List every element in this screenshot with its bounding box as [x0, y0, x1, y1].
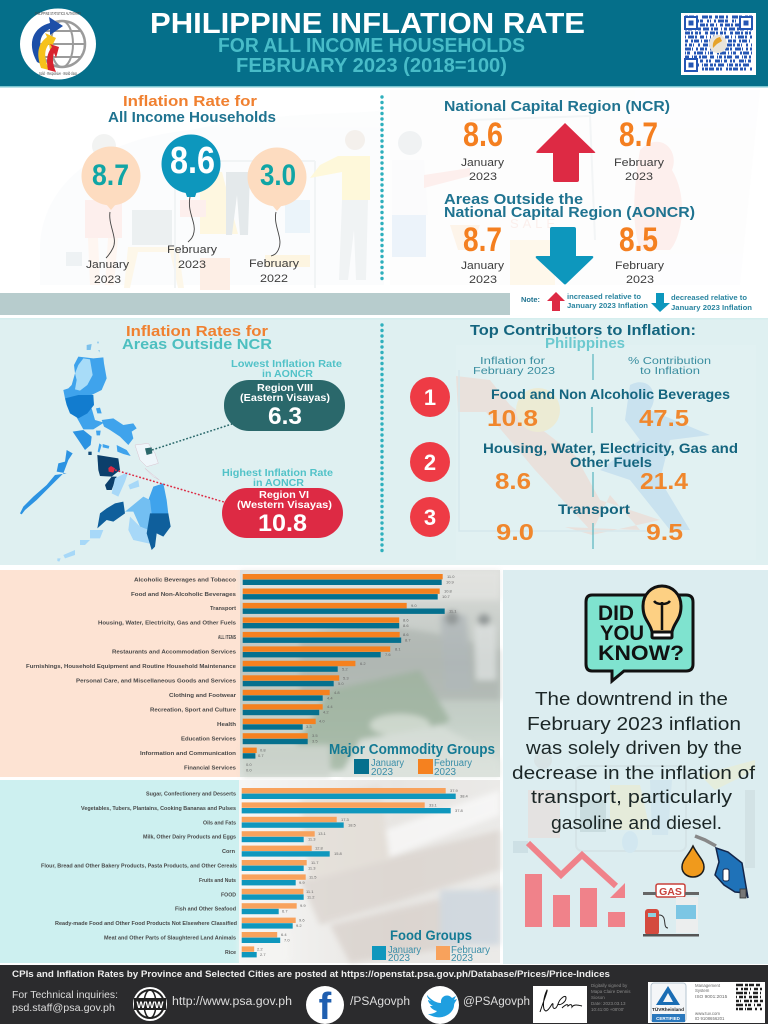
row: transport: 9.0	[411, 603, 417, 608]
row: furnishings: Furnishings, Household Equipment and Routine Household Maintenance	[26, 664, 236, 670]
row: food	[221, 889, 315, 900]
row: information: 0.7	[258, 753, 264, 758]
title: PHILIPPINE INFLATION RATE	[150, 8, 585, 40]
row: clothing: Clothing and Footwear	[169, 693, 237, 699]
faint shopping illustration	[40, 90, 760, 290]
Philippine map	[20, 342, 171, 562]
note legend: January 2023 Inflation	[671, 305, 752, 312]
row: education: 3.5	[312, 733, 318, 738]
NCR January value	[461, 116, 505, 183]
certification badge: System	[695, 988, 710, 993]
arrow: NCR up	[536, 123, 595, 182]
row: all items: 8.6	[403, 632, 409, 637]
digital signature: 10:41:00 +08'00'	[591, 1007, 624, 1012]
row: flour: 11.7	[311, 860, 319, 865]
icon: did you know speech bubble	[586, 586, 693, 681]
icon: falling bar chart	[525, 843, 625, 927]
AONCR January value: January	[461, 260, 505, 272]
digital signature: Mapa Claire Dennis	[591, 989, 631, 994]
note legend: increased relative to	[567, 294, 641, 301]
footer	[0, 965, 768, 1024]
row: vegetables: 33.1	[429, 802, 438, 807]
row: sugar: 37.9	[450, 788, 459, 793]
certification badge: www.tuv.com	[695, 1011, 720, 1016]
row: milk: 11.3	[308, 837, 316, 842]
header banner	[0, 0, 768, 88]
column header: contribution: % Contribution	[628, 355, 711, 367]
row: vegetables	[81, 802, 464, 813]
heading: inflation rate for all income households	[108, 93, 276, 126]
chart heading and legend: February	[451, 945, 490, 956]
icon: website: WWW	[136, 1000, 164, 1011]
chart heading and legend: Major Commodity Groups	[329, 742, 495, 758]
balloon: February 2023: February	[167, 244, 218, 256]
panel: top contributors	[410, 322, 756, 560]
heading: NCR: National Capital Region (NCR)	[444, 98, 670, 115]
callout: region VI pill	[222, 488, 343, 538]
row: rice: 2.7	[260, 952, 266, 957]
callout: lowest inflation rate label: in AONCR	[262, 369, 314, 380]
row: financial: 0.0	[246, 768, 252, 773]
footer notice: CPIs and Inflation Rates by Province and Selected Cities are posted at https://openstat.psa.gov.ph/Database/Prices/Price-Indices	[12, 969, 610, 979]
row: fish	[175, 903, 306, 914]
row: food: 11.1	[306, 889, 314, 894]
column header: inflation	[473, 355, 555, 377]
technical inquiries	[12, 989, 118, 1014]
contributor 2: 2	[424, 450, 436, 475]
row: rice: Rice	[225, 950, 236, 956]
chart heading and legend: February	[434, 758, 472, 769]
row: sugar	[146, 788, 469, 799]
row: fish: Fish and Other Seafood	[175, 907, 237, 913]
icon: light bulb	[643, 586, 681, 638]
column header: contribution	[628, 355, 711, 377]
row: fish: 9.9	[300, 903, 306, 908]
icon: did you know speech bubble: DID	[598, 602, 634, 625]
AONCR January value: 8.7	[463, 221, 502, 259]
subtitle	[218, 35, 525, 77]
balloon: January 2023: January	[86, 259, 130, 271]
row: financial: Financial Services	[184, 765, 236, 771]
row: all items: 8.7	[405, 637, 411, 642]
faint shopping illustration: SALE	[510, 216, 555, 231]
NCR February value: 2023	[625, 171, 653, 183]
heading: AONCR: Areas Outside the	[444, 191, 583, 208]
explanatory text: decrease in the inflation of	[512, 763, 756, 783]
note legend: January 2023 Inflation	[567, 303, 648, 310]
chart heading and legend: 2023	[451, 953, 473, 964]
balloon: February 2022: 3.0	[260, 159, 296, 192]
row: corn: 15.8	[334, 851, 343, 856]
note legend: Note:	[521, 297, 540, 304]
row: flour: 11.3	[308, 866, 316, 870]
row: housing: 8.6	[403, 623, 409, 628]
digital signature: Digitally signed by	[591, 983, 628, 988]
row: all items	[218, 632, 411, 643]
row: information: 0.8	[260, 748, 266, 753]
NCR January value: 2023	[469, 171, 497, 183]
row: ready-made: 9.6	[299, 918, 305, 923]
row: restaurants: Restaurants and Accommodation Services	[112, 650, 236, 656]
contributor 2: Other Fuels	[570, 454, 652, 470]
panel: all income households and regional rates	[0, 90, 760, 315]
callout: region VIII pill: 6.3	[268, 403, 302, 430]
callout: region VIII pill: (Eastern Visayas)	[240, 393, 330, 404]
chart heading and legend: 2023	[371, 767, 393, 778]
row: financial	[184, 762, 252, 773]
row: fruits	[199, 874, 317, 885]
row: health: 4.0	[319, 719, 325, 724]
callout: region VIII pill	[224, 380, 345, 431]
AONCR February value	[615, 221, 665, 286]
row: food and non-alcoholic: 10.7	[442, 594, 451, 599]
callout: region VI pill: Region VI	[259, 490, 309, 501]
row: personal care: Personal Care, and Miscellaneous Goods and Services	[76, 679, 236, 685]
NCR January value: January	[461, 157, 505, 169]
contributor 3: 9.5	[646, 519, 683, 545]
row: corn: 12.8	[315, 846, 324, 851]
QR code	[681, 13, 756, 75]
row: fish: 6.7	[282, 909, 288, 914]
certification badge: Management	[695, 983, 721, 988]
contributor 3	[410, 497, 683, 545]
chart heading and legend	[372, 928, 490, 964]
row: transport: Transport	[210, 606, 236, 612]
row: oils: 18.5	[348, 822, 357, 827]
contributor 2: 21.4	[640, 468, 688, 494]
balloon: January 2023: 2023	[94, 274, 121, 286]
contributor 2	[410, 440, 738, 494]
heading: inflation rate for all income households: All Income Households	[108, 109, 276, 126]
panel: major commodity groups chart	[0, 570, 500, 778]
row: meat: 6.4	[281, 932, 287, 937]
certification badge: CERTIFIED	[656, 1016, 681, 1021]
row: flour: Flour, Bread and Other Bakery Products, Pasta Products, and Other Cereals	[41, 864, 237, 870]
explanatory text: was solely driven by the	[525, 738, 742, 758]
balloon: February 2022	[248, 148, 306, 285]
explanatory text: The downtrend in the	[535, 689, 728, 709]
heading: AONCR	[444, 191, 695, 221]
column header: inflation: February 2023	[473, 365, 555, 377]
row: financial: 0.0	[246, 762, 252, 767]
subtitle: FEBRUARY 2023 (2018=100)	[236, 55, 507, 77]
icon: did you know speech bubble: KNOW?	[598, 642, 684, 665]
panel: did you know	[503, 570, 768, 964]
certification badge	[648, 982, 765, 1023]
row: food: FOOD	[221, 892, 236, 898]
icon: fuel nozzle	[695, 836, 748, 898]
icon: gas station: GAS	[659, 886, 682, 898]
chart heading and legend: 2023	[434, 767, 456, 778]
row: food and non-alcoholic: Food and Non-Alcoholic Beverages	[131, 592, 236, 598]
row: personal care: 5.3	[343, 675, 349, 680]
row: information: Information and Communication	[140, 751, 237, 757]
row: alcoholic beverages: 10.9	[446, 580, 455, 584]
faint shoppers illustration	[513, 751, 755, 868]
callout: lowest inflation rate label: Lowest Inflation Rate	[231, 359, 342, 370]
icon: fuel drop	[682, 846, 704, 877]
row: education: 3.5	[312, 739, 318, 744]
technical inquiries: For Technical inquiries:	[12, 989, 118, 1001]
dotted leader: highest	[115, 470, 224, 502]
callout: region VI pill: 10.8	[258, 510, 307, 537]
panel: food groups chart	[0, 780, 500, 964]
technical inquiries: psd.staff@psa.gov.ph	[12, 1002, 115, 1014]
contributor 1	[410, 377, 730, 431]
NCR February value: February	[614, 157, 665, 169]
column header: contribution: to Inflation	[640, 365, 700, 377]
explanatory text: gasoline and diesel.	[551, 813, 722, 833]
faint falling arrow and runner	[456, 345, 756, 560]
explanatory text: transport, particularly	[531, 787, 732, 807]
AONCR February value: 8.5	[619, 221, 658, 259]
AONCR January value: 2023	[469, 274, 497, 286]
digital signature: Date: 2023.03.13	[591, 1001, 626, 1006]
heading: inflation rates for areas outside NCR: Inflation Rates for	[126, 323, 268, 340]
row: housing: Housing, Water, Electricity, Gas and Other Fuels	[98, 621, 236, 627]
heading: top contributors: Philippines	[545, 335, 625, 352]
row: vegetables: Vegetables, Tubers, Plantains, Cooking Bananas and Pulses	[81, 806, 236, 812]
row: all items: ALL ITEMS	[218, 635, 236, 641]
contributor 1: 47.5	[639, 405, 689, 431]
row: furnishings	[26, 661, 366, 672]
icon: did you know speech bubble: YOU	[600, 622, 644, 645]
row: food and non-alcoholic	[131, 588, 453, 600]
heading: inflation rates for areas outside NCR: Areas Outside NCR	[122, 336, 272, 353]
row: ready-made	[55, 918, 305, 929]
chart heading and legend: Food Groups	[390, 928, 472, 943]
website url: http://www.psa.gov.ph	[172, 996, 292, 1008]
row: furnishings: 6.2	[360, 661, 366, 666]
contributor 2: Housing, Water, Electricity, Gas and	[483, 440, 738, 456]
callout: highest inflation rate label: in AONCR	[253, 478, 305, 489]
chart heading and legend	[329, 742, 495, 778]
row: recreation: 4.2	[323, 710, 329, 715]
icon: twitter	[421, 986, 459, 1024]
row: ready-made: 9.2	[296, 923, 302, 928]
balloon: January 2023	[82, 146, 140, 286]
row: restaurants: 8.1	[395, 646, 401, 651]
AONCR February value: 2023	[626, 274, 654, 286]
row: transport: 11.1	[449, 608, 457, 613]
row: sugar: 38.4	[460, 794, 469, 798]
PSA logo: Solid · Responsive · World-class	[39, 71, 77, 76]
row: meat: 7.0	[284, 938, 290, 942]
row: alcoholic beverages	[134, 574, 455, 585]
row: personal care	[76, 675, 349, 686]
chart heading and legend: January	[388, 945, 421, 956]
heading: top contributors	[470, 322, 696, 352]
callout: highest inflation rate label: Highest Inflation Rate	[222, 468, 333, 479]
row: recreation	[150, 704, 333, 715]
AONCR February value: February	[615, 260, 665, 272]
certification badge: ISO 9001:2015	[695, 994, 728, 1000]
row: restaurants	[112, 646, 401, 657]
facebook handle: /PSAgovph	[350, 996, 410, 1008]
row: milk: 13.1	[318, 831, 327, 836]
row: recreation: Recreation, Sport and Culture	[150, 707, 236, 713]
row: education: Education Services	[181, 736, 236, 742]
heading: AONCR: National Capital Region (AONCR)	[444, 204, 695, 221]
commodity bars	[26, 574, 457, 773]
certification badge: ID 9108656201	[695, 1016, 725, 1021]
row: sugar: Sugar, Confectionery and Desserts	[146, 792, 236, 798]
row: education	[181, 733, 318, 744]
row: corn: Corn	[222, 849, 236, 855]
row: alcoholic beverages: 11.0	[447, 574, 455, 579]
subtitle: FOR ALL INCOME HOUSEHOLDS	[218, 35, 525, 57]
dotted leader: lowest	[152, 424, 232, 450]
callout: region VIII pill: Region VIII	[257, 383, 313, 394]
balloon: February 2023: 2023	[178, 259, 206, 271]
row: restaurants: 7.6	[385, 652, 391, 657]
balloon: January 2023: 8.7	[92, 159, 129, 192]
AONCR January value	[461, 221, 505, 286]
balloon: February 2023: 8.6	[170, 140, 215, 182]
row: housing	[98, 617, 409, 628]
row: oils: Oils and Fats	[203, 820, 236, 826]
chart heading and legend: January	[371, 758, 404, 769]
row: meat	[104, 932, 290, 943]
heading: inflation rates for areas outside NCR	[122, 323, 272, 353]
row: oils	[203, 817, 357, 828]
row: fruits: 11.5	[309, 874, 317, 879]
row: milk: Milk, Other Dairy Products and Eggs	[143, 835, 236, 841]
PSA logo	[20, 8, 96, 80]
certification badge: TÜVRheinland	[652, 1006, 684, 1012]
heading: inflation rate for all income households: Inflation Rate for	[123, 93, 257, 110]
row: furnishings: 5.2	[342, 666, 348, 671]
row: flour	[41, 860, 319, 871]
row: fruits: Fruits and Nuts	[199, 878, 236, 884]
panel: areas outside NCR	[20, 323, 345, 562]
row: health: Health	[217, 722, 237, 728]
row: oils: 17.3	[341, 817, 350, 822]
row: food: 11.2	[307, 894, 315, 899]
row: ready-made: Ready-made Food and Other Food Products Not Elsewhere Classified	[55, 921, 238, 927]
note legend	[521, 292, 752, 312]
balloon: February 2022: 2022	[260, 273, 288, 285]
row: clothing: 4.4	[327, 695, 333, 700]
row: rice	[225, 946, 266, 957]
explanatory text	[512, 689, 756, 833]
heading: top contributors: Top Contributors to Inflation:	[470, 322, 696, 339]
row: transport	[210, 603, 457, 614]
row: alcoholic beverages: Alcoholic Beverages and Tobacco	[134, 577, 237, 583]
row: fruits: 9.9	[299, 880, 305, 885]
digital signature: Sioson	[591, 995, 605, 1000]
note legend: decreased relative to	[671, 295, 747, 302]
row: health: 3.3	[306, 724, 312, 729]
PSA logo: PHILIPPINE STATISTICS AUTHORITY	[35, 11, 81, 16]
chart heading and legend: 2023	[388, 953, 410, 964]
contributor 1: 10.8	[487, 405, 538, 431]
row: information	[140, 748, 266, 759]
food group bars	[41, 788, 469, 957]
icon: facebook	[306, 986, 344, 1024]
icon: gas station	[643, 884, 699, 936]
contributor 1: Food and Non Alcoholic Beverages	[491, 386, 730, 402]
NCR January value: 8.6	[463, 116, 503, 154]
row: milk	[143, 831, 327, 842]
balloon: February 2023	[162, 134, 220, 271]
contributor 2: 8.6	[495, 468, 531, 494]
grey band	[0, 293, 510, 315]
icon: website	[133, 987, 167, 1021]
row: housing: 8.6	[403, 617, 409, 622]
row: clothing: 4.8	[334, 690, 340, 695]
row: rice: 2.2	[257, 946, 263, 951]
balloon: February 2022: February	[249, 258, 300, 270]
row: personal care: 5.0	[338, 681, 344, 686]
row: corn	[222, 846, 343, 857]
contributor 3: 9.0	[496, 519, 534, 545]
NCR February value: 8.7	[619, 116, 658, 154]
row: recreation: 4.4	[327, 704, 333, 709]
row: meat: Meat and Other Parts of Slaughtered Land Animals	[104, 936, 236, 942]
callout: lowest inflation rate label	[231, 359, 342, 380]
column header: inflation: Inflation for	[480, 355, 546, 367]
twitter handle: @PSAgovph	[463, 996, 530, 1008]
NCR February value	[614, 116, 665, 183]
contributor 3: 3	[424, 505, 436, 530]
row: clothing	[169, 690, 340, 701]
callout: highest inflation rate label	[222, 468, 333, 489]
arrow: AONCR down	[536, 227, 593, 284]
contributor 3: Transport	[558, 501, 630, 517]
digital signature	[533, 983, 631, 1023]
row: food and non-alcoholic: 10.8	[444, 588, 453, 594]
row: vegetables: 37.8	[455, 808, 464, 813]
row: health	[217, 719, 325, 730]
explanatory text: February 2023 inflation	[527, 714, 741, 734]
contributor 1: 1	[424, 385, 436, 410]
callout: region VI pill: (Western Visayas)	[237, 500, 332, 511]
